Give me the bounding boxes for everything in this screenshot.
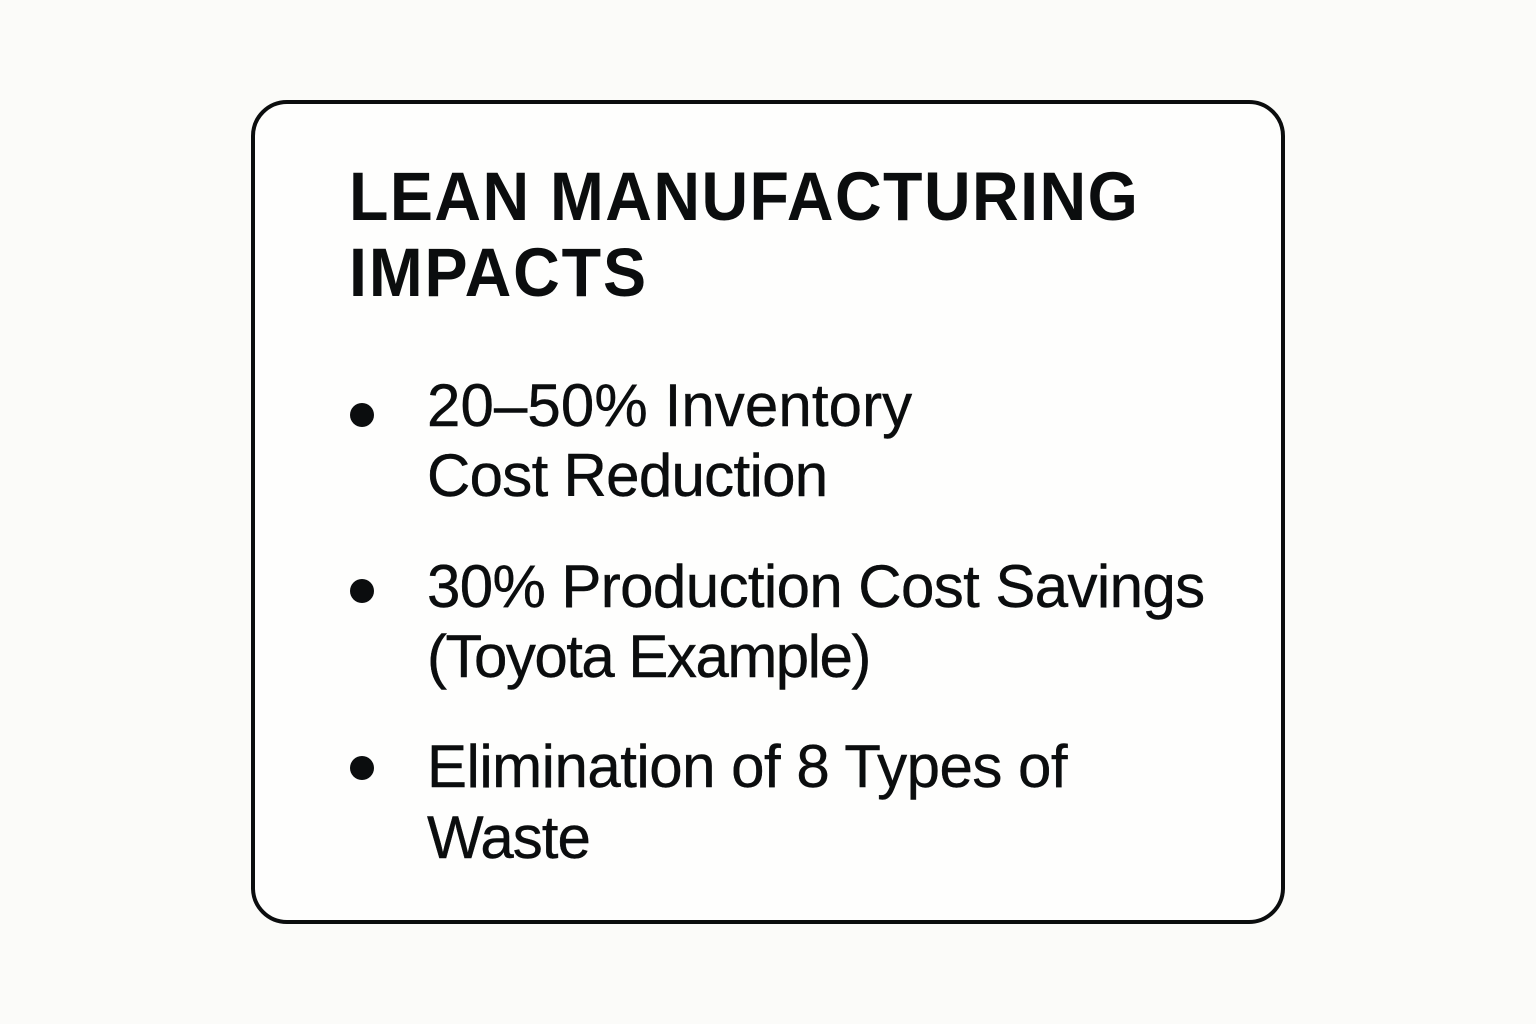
bullet text 2: (Toyota Example)	[427, 623, 870, 690]
bullet text 3: Waste	[427, 804, 590, 871]
title: LEAN MANUFACTURING	[349, 158, 1139, 235]
bullet icon 3	[350, 756, 374, 780]
bullet text 1: 20–50% Inventory	[427, 372, 912, 439]
panel: lean manufacturing impacts card	[251, 100, 1285, 924]
bullet text 2: 30% Production Cost Savings	[427, 553, 1205, 620]
bullet text 3: Elimination of 8 Types of	[427, 733, 1067, 800]
bullet text 1	[427, 372, 912, 509]
bullet text 2	[427, 553, 1205, 690]
title	[349, 158, 1139, 311]
bullet text 3	[427, 733, 1068, 871]
bullet text 1: Cost Reduction	[427, 442, 827, 509]
bullet icon 1	[350, 403, 374, 427]
title: IMPACTS	[349, 234, 648, 311]
bullet icon 2	[350, 579, 374, 603]
